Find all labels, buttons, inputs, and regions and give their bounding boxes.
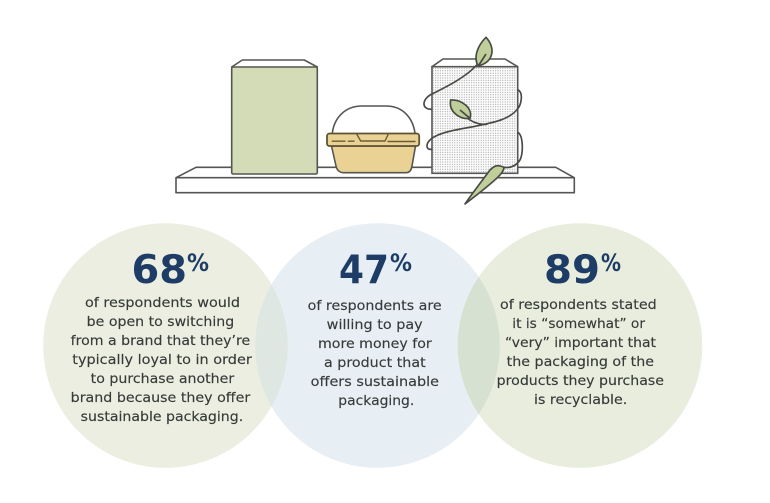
leaf: middle <box>450 100 471 119</box>
dotted box lid <box>432 59 518 67</box>
description: typically loyal to in order <box>72 352 252 368</box>
description: offers sustainable <box>311 374 439 390</box>
description: “very” important that <box>505 335 656 351</box>
stat: 68% <box>71 248 252 425</box>
percent sign: % <box>187 249 209 277</box>
venn circles <box>43 223 702 468</box>
overlap: left and middle <box>256 285 288 406</box>
vine <box>424 65 522 167</box>
green box <box>232 60 317 174</box>
description: be open to switching <box>87 314 234 330</box>
description: more money for <box>318 336 432 352</box>
dotted box texture <box>433 68 517 172</box>
shelf <box>176 167 574 193</box>
leaf: top <box>476 37 492 66</box>
description: a product that <box>324 355 426 371</box>
container dome lid <box>332 106 415 133</box>
percent sign: % <box>601 249 621 277</box>
description: of respondents are <box>308 298 442 314</box>
infographic <box>43 36 702 468</box>
description: sustainable packaging. <box>81 409 243 425</box>
stat: 89% <box>497 248 664 408</box>
circle: middle <box>255 223 500 468</box>
dotted box <box>432 59 518 173</box>
description: willing to pay <box>327 317 423 333</box>
dotted box front <box>432 67 518 173</box>
description <box>497 297 664 408</box>
number 47: 47 <box>339 248 389 293</box>
container rim details <box>332 134 415 142</box>
container rim <box>327 134 419 146</box>
food container <box>327 106 419 173</box>
stat: 47% <box>308 248 442 409</box>
description <box>308 298 442 409</box>
description: products they purchase <box>497 373 664 389</box>
description <box>71 295 252 425</box>
circle: right <box>458 223 702 468</box>
description: to purchase another <box>91 371 235 387</box>
overlap: middle and right <box>458 277 500 414</box>
container base <box>332 146 416 173</box>
number 89: 89 <box>544 248 600 293</box>
description: of respondents would <box>85 295 240 311</box>
illustration: packaging on a shelf <box>176 37 574 204</box>
green box front <box>232 67 317 174</box>
description: from a brand that they’re <box>71 333 250 349</box>
description: brand because they offer <box>71 390 251 406</box>
circle: left <box>43 223 288 468</box>
description: it is “somewhat” or <box>512 316 645 332</box>
number 68: 68 <box>132 248 187 293</box>
description: is recyclable. <box>534 392 627 408</box>
leaf: bottom <box>465 166 504 204</box>
description: of respondents stated <box>500 297 657 313</box>
vine with leaves <box>424 37 522 204</box>
description: the packaging of the <box>507 354 654 370</box>
description: packaging. <box>338 393 414 409</box>
green box lid <box>232 60 317 67</box>
percent sign: % <box>390 249 412 277</box>
